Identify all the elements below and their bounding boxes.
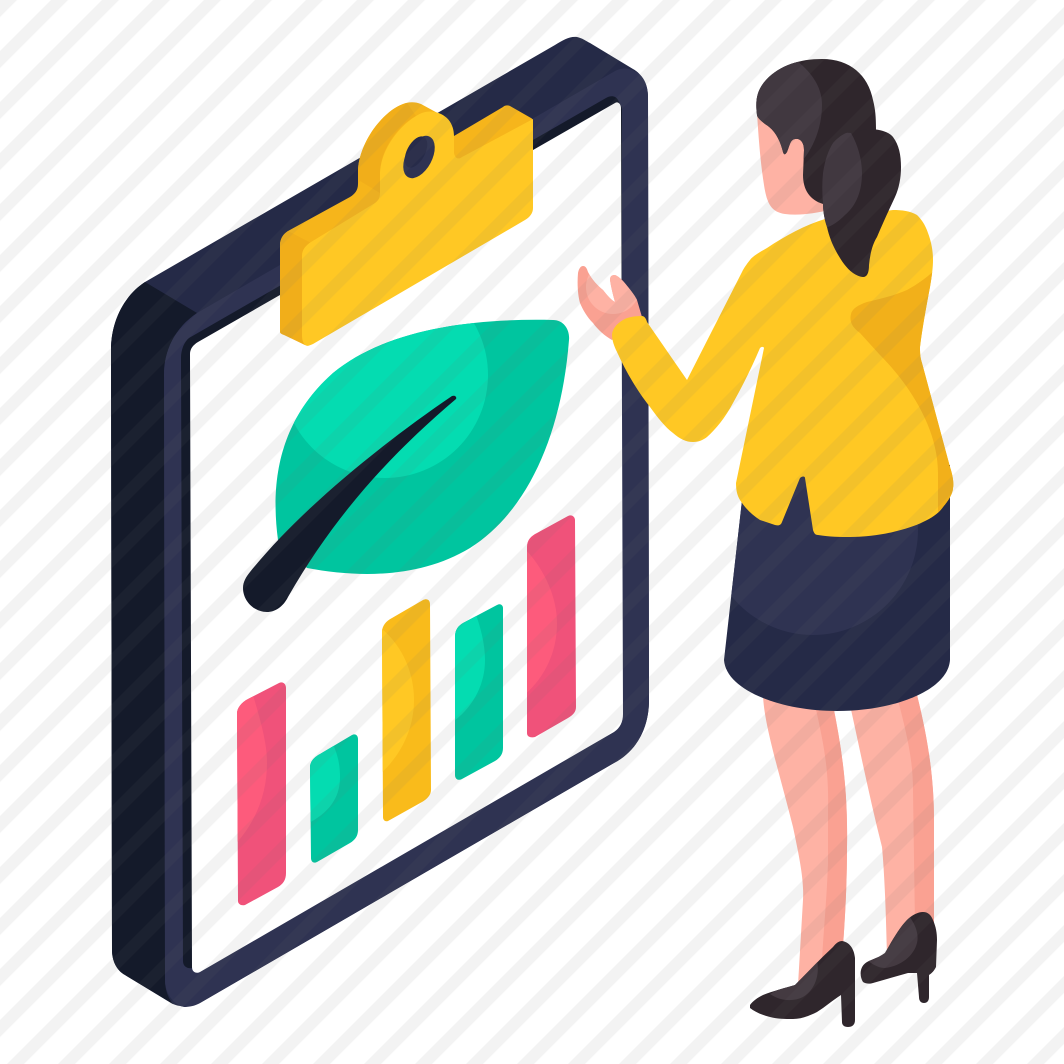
right leg — [850, 695, 934, 955]
clip hole inner shade — [400, 133, 432, 171]
clip left dark side — [280, 231, 311, 345]
neck and face — [757, 110, 830, 215]
hand highlight — [586, 274, 637, 314]
clipboard front frame — [164, 68, 649, 1007]
right shoe — [860, 912, 937, 1003]
left leg — [763, 695, 847, 985]
bar 3 highlight — [382, 629, 414, 772]
hair highlight — [756, 62, 822, 159]
clip hole — [397, 131, 441, 183]
clipboard left depth face — [111, 282, 197, 1004]
bar 1 highlight — [237, 696, 267, 842]
clipboard inner shadow — [181, 96, 622, 968]
clipboard paper — [190, 102, 623, 973]
bar 4 highlight — [455, 616, 485, 720]
skirt highlight — [731, 476, 918, 635]
bar 4 green — [455, 604, 503, 780]
clipboard — [111, 37, 649, 1007]
bar 2 green — [310, 734, 358, 863]
skirt — [724, 465, 950, 711]
bar 1 pink — [237, 682, 286, 906]
left shoe highlight — [770, 960, 818, 1000]
clip arch side — [358, 103, 416, 193]
bar 3 yellow — [382, 599, 431, 822]
clip depth face — [280, 102, 533, 345]
leaf stem — [243, 396, 456, 612]
raised hand — [578, 266, 642, 340]
bar chart — [230, 510, 582, 910]
right leg shade — [898, 695, 934, 925]
metal clip — [280, 102, 533, 346]
bar 5 highlight — [527, 552, 557, 692]
clip front face — [302, 112, 533, 346]
leaf highlight — [294, 323, 488, 478]
bar 2 highlight — [310, 746, 340, 822]
jacket shade — [850, 265, 960, 515]
woman — [570, 50, 960, 1030]
hair — [756, 59, 876, 204]
leaf body — [276, 320, 570, 574]
ponytail — [822, 130, 901, 277]
left shoe — [750, 941, 855, 1027]
bar 5 pink — [527, 515, 576, 738]
leaf icon — [243, 320, 570, 612]
ponytail highlight — [822, 132, 862, 227]
jacket — [605, 205, 960, 545]
right shoe highlight — [868, 916, 918, 968]
clipboard back: top depth face — [111, 37, 649, 1006]
left leg shade — [815, 705, 847, 960]
